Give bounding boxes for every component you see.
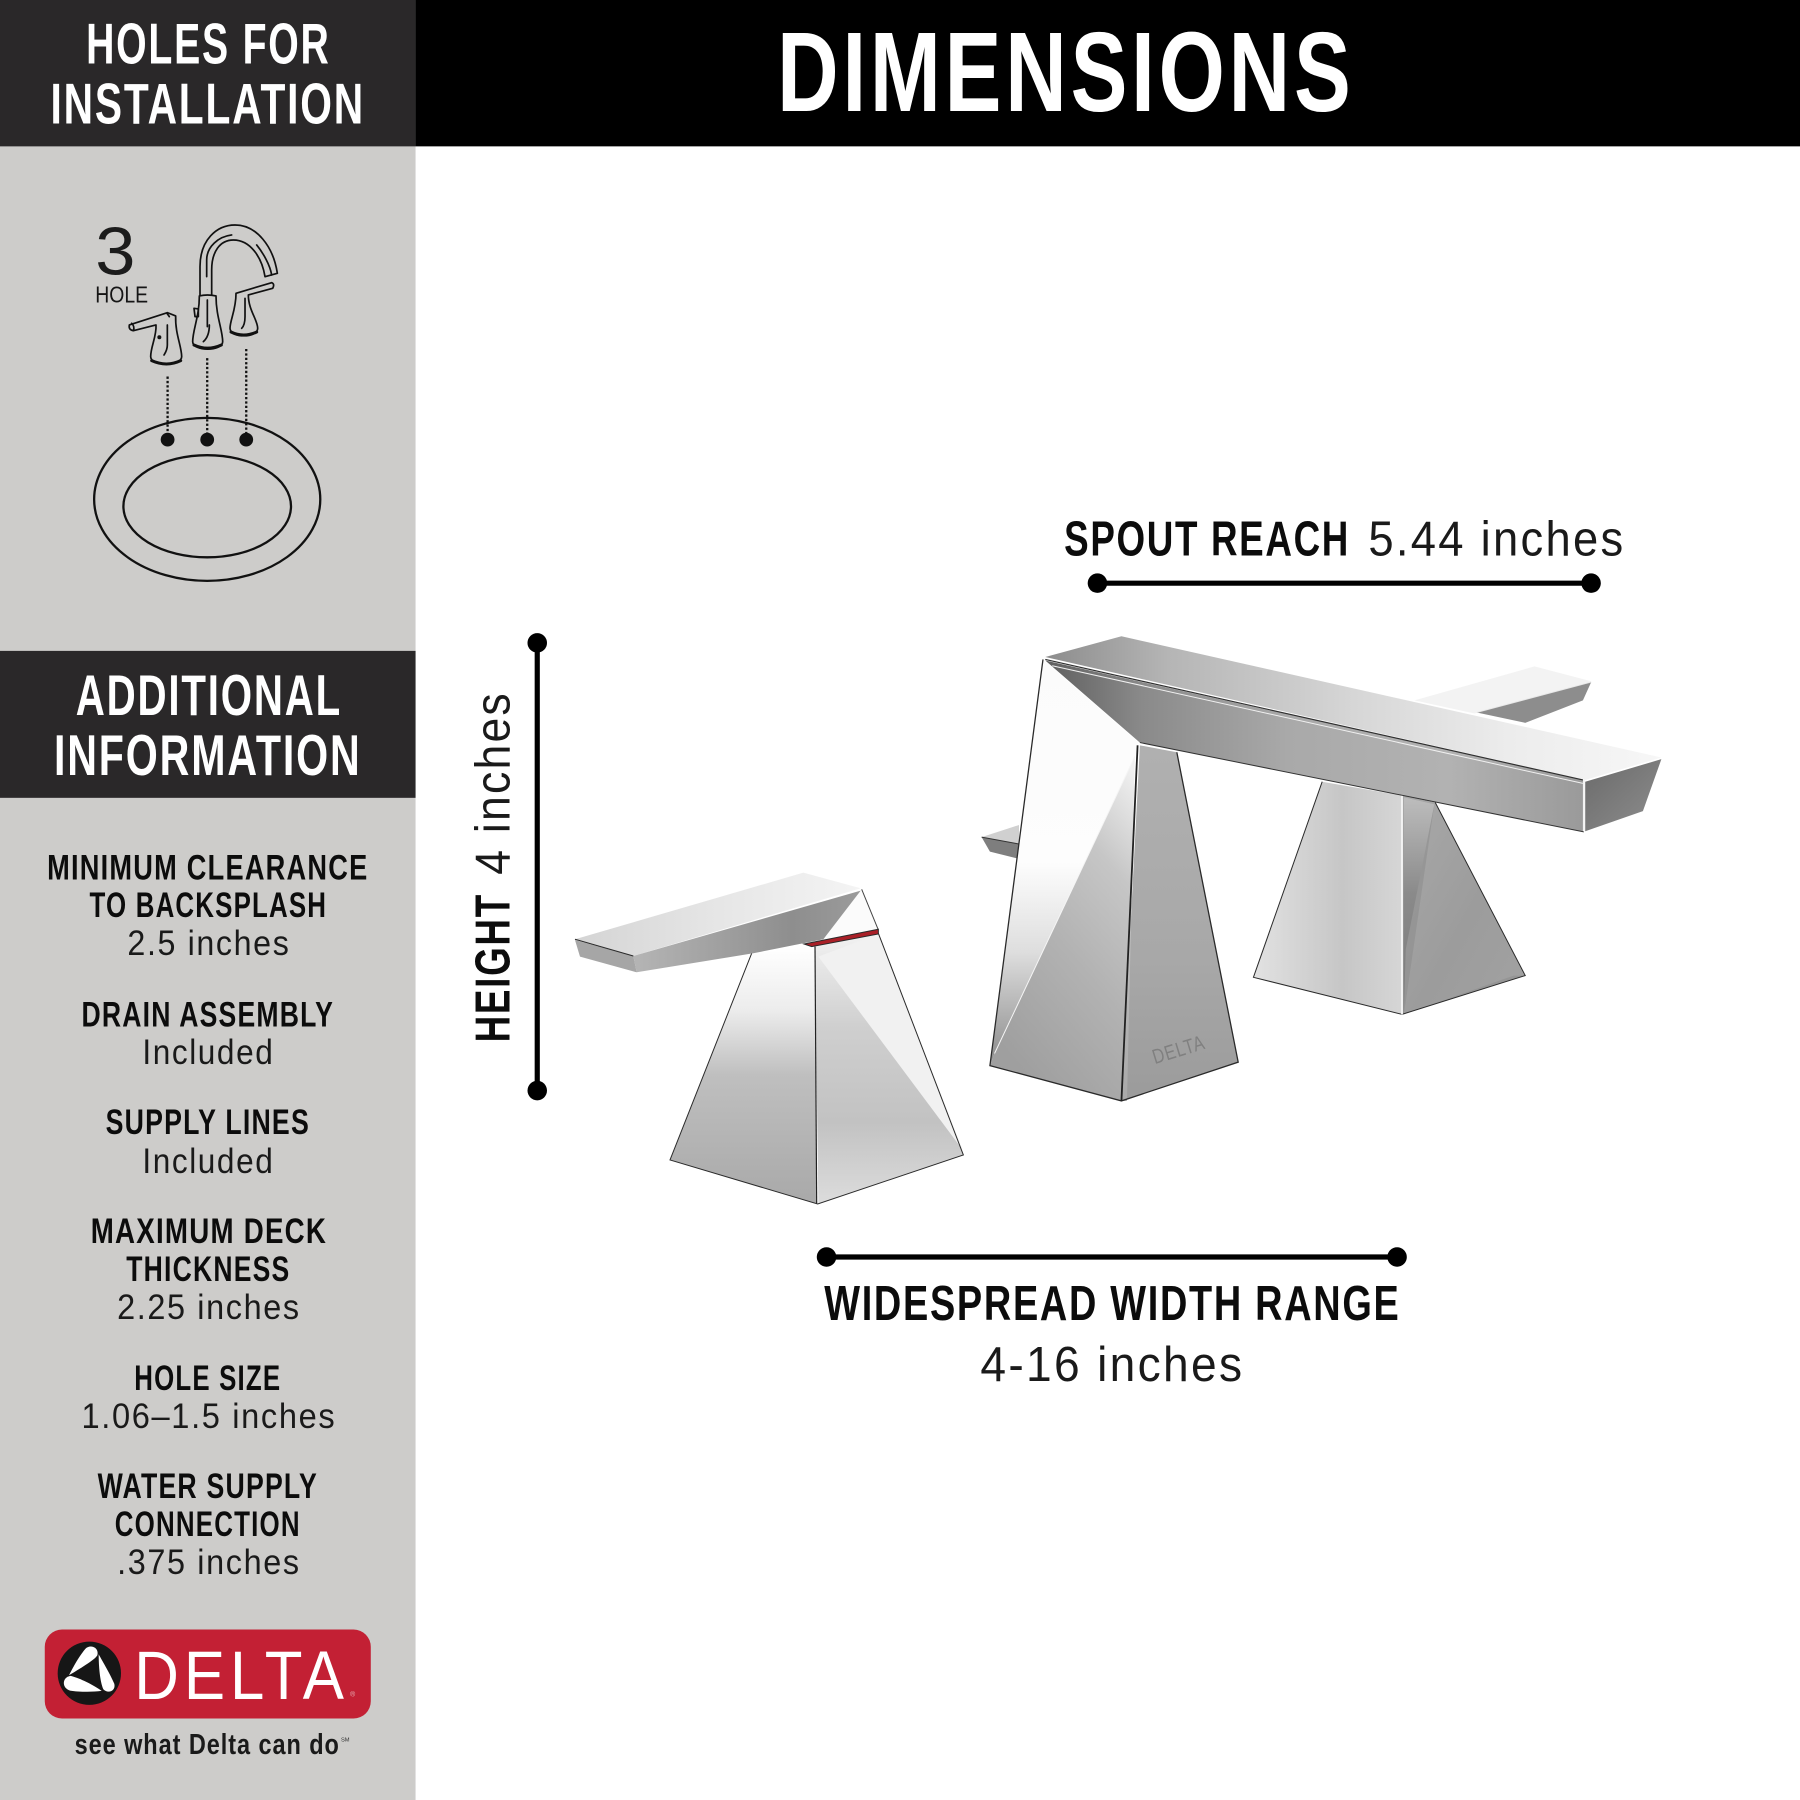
back lever stub [982,825,1019,859]
spec: water supply connection [98,1466,318,1582]
measurement: widespread width range: 4-16 inches [980,1337,1244,1392]
spec: maximum deck thickness: THICKNESS [126,1249,290,1289]
right handle base [1253,782,1525,1014]
handle lever [575,873,878,972]
spec: water supply connection: WATER SUPPLY [98,1466,318,1506]
spec: hole size: 1.06–1.5 inches [82,1396,336,1436]
logo: delta: ® [350,1691,355,1699]
measurement: widespread width range [817,1247,1407,1392]
spec: water supply connection: .375 inches [117,1542,301,1582]
spec: maximum deck thickness [91,1211,327,1327]
measurement: height: 4 inches [466,691,521,875]
spec: hole size [82,1358,336,1436]
tagline: see what Delta can do [75,1729,340,1761]
spec: water supply connection: CONNECTION [115,1504,301,1544]
heading: holes for installation: INSTALLATION [51,72,365,136]
logo: delta [45,1630,371,1761]
heading: additional information [0,651,416,798]
measurement: height [466,633,547,1100]
measurement: spout reach [1064,512,1626,593]
spec: minimum clearance: TO BACKSPLASH [90,885,327,925]
engraved brand mark: DELTA [1150,1031,1208,1069]
red temperature marker [804,929,878,947]
measurement: height: HEIGHT [466,893,521,1042]
logo: delta: SM [341,1737,350,1743]
label: 3 hole: HOLE [95,281,148,307]
spec: minimum clearance [47,847,368,963]
title bar: dimensions [416,0,1800,146]
faucet: left handle [575,873,963,1204]
label: 3 hole: 3 [95,214,135,289]
dotted guide lines [168,349,246,439]
spec: drain assembly: Included [142,1032,274,1072]
measurement: spout reach: 5.44 inches [1368,512,1626,567]
icon: sink basin [94,418,320,581]
icon: delta emblem [58,1642,121,1705]
measurement: spout reach: SPOUT REACH [1064,512,1350,567]
heading: holes for installation [0,0,416,146]
spec: maximum deck thickness: MAXIMUM DECK [91,1211,327,1251]
spec: supply lines [106,1102,310,1181]
spec: supply lines: SUPPLY LINES [106,1102,310,1142]
spec: minimum clearance: 2.5 inches [127,923,290,963]
spec: maximum deck thickness: 2.25 inches [117,1287,301,1327]
spout body left faces [990,659,1238,1101]
spec: drain assembly [82,994,334,1072]
spec: supply lines: Included [142,1141,274,1181]
icon: faucet line drawing [129,225,277,364]
heading: holes for installation: HOLES FOR [86,13,331,77]
spout arm [1045,636,1661,832]
heading: additional information: ADDITIONAL [76,664,342,728]
logo: delta: DELTA [134,1637,349,1714]
handle base [670,933,963,1204]
spec: drain assembly: DRAIN ASSEMBLY [82,994,334,1034]
spec: minimum clearance: MINIMUM CLEARANCE [47,847,368,887]
measurement: widespread width range: WIDESPREAD WIDTH RANGE [824,1276,1401,1331]
icon: three hole faucet and sink [94,214,320,581]
label: 3 hole [95,214,148,307]
right lever [1414,666,1591,723]
title bar: dimensions: DIMENSIONS [777,9,1355,136]
spec: hole size: HOLE SIZE [134,1358,281,1398]
panel: sidebar [0,0,416,1800]
heading: additional information: INFORMATION [54,724,362,788]
faucet: spout and right handle [982,636,1661,1101]
